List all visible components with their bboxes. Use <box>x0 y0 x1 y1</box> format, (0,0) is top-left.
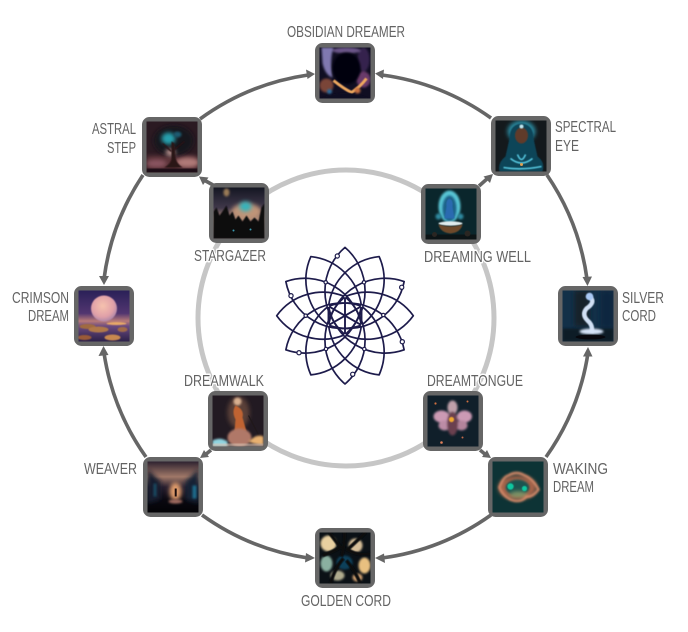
label: Weaver: WEAVER <box>84 461 137 478</box>
arrow: Waking Dream to Golden Cord <box>375 515 491 563</box>
label: Waking Dream: WAKING <box>553 461 608 478</box>
node: Spectral Eye <box>494 118 548 174</box>
node: Dreamwalk <box>210 394 266 448</box>
node: Weaver <box>146 460 200 514</box>
node: Dreaming Well <box>424 186 478 242</box>
label: Dreaming Well: DREAMING WELL <box>424 249 531 266</box>
arrow: Dreamtongue to Waking Dream <box>480 450 491 458</box>
label: Crimson Dream: DREAM <box>28 308 69 325</box>
arrow: Spectral Eye to Silver Cord <box>547 175 592 286</box>
arrow: Astral Step to Obsidian Dreamer <box>200 70 315 119</box>
label: Spectral Eye: SPECTRAL <box>555 119 616 136</box>
node: Dreamtongue <box>426 394 480 448</box>
label: Silver Cord: SILVER <box>622 290 664 307</box>
label: Crimson Dream: CRIMSON <box>12 290 69 307</box>
arrow: Weaver to Crimson Dream <box>98 346 146 457</box>
arrow: Weaver to Golden Cord <box>202 515 315 562</box>
label: Spectral Eye: EYE <box>555 138 579 155</box>
arrow: Dreamwalk to Weaver <box>200 450 211 458</box>
node: Crimson Dream <box>76 288 132 344</box>
label: Astral Step <box>92 121 136 157</box>
label: Golden Cord: GOLDEN CORD <box>301 593 391 610</box>
label: Waking Dream <box>553 461 608 496</box>
label: Crimson Dream <box>12 290 69 325</box>
label: Waking Dream: DREAM <box>553 479 594 496</box>
label: Astral Step: STEP <box>107 140 136 157</box>
label: Silver Cord: CORD <box>622 308 656 325</box>
arrow: Dreaming Well to Spectral Eye <box>479 174 493 186</box>
label: Silver Cord <box>622 290 664 325</box>
central mandala logo <box>276 245 414 387</box>
arrow: Stargazer to Astral Step <box>199 176 213 185</box>
arrow: Spectral Eye to Obsidian Dreamer <box>375 70 491 118</box>
node: Waking Dream <box>490 460 546 514</box>
label: Dreamwalk: DREAMWALK <box>184 373 264 390</box>
label: Astral Step: ASTRAL <box>92 121 136 138</box>
node: Obsidian Dreamer <box>318 46 372 100</box>
arrow: Waking Dream to Silver Cord <box>546 347 592 457</box>
label: Stargazer: STARGAZER <box>194 248 266 265</box>
node: Silver Cord <box>560 288 616 344</box>
inner ring <box>198 170 494 466</box>
label: Dreamtongue: DREAMTONGUE <box>427 373 523 390</box>
node: Astral Step <box>144 120 200 174</box>
label: Obsidian Dreamer: OBSIDIAN DREAMER <box>287 24 405 41</box>
arrow: Astral Step to Crimson Dream <box>99 175 143 285</box>
node: Golden Cord <box>318 530 372 586</box>
outer cycle arrows <box>98 70 592 563</box>
label: Spectral Eye <box>555 119 616 155</box>
node: Stargazer <box>212 186 266 240</box>
